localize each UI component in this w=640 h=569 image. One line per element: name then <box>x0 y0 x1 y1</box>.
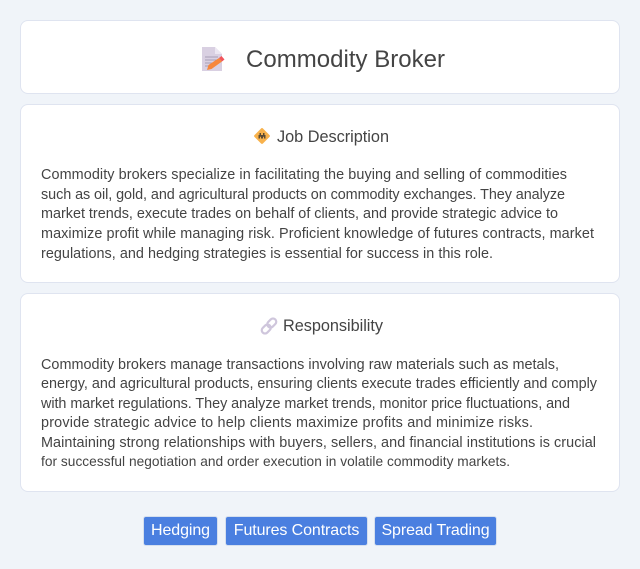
text block: responsibility: provide strategic advice to help clients maximize profits and minimize risks. <box>41 415 533 431</box>
tag: hedging <box>143 516 218 546</box>
text block: job description: market trends, execute trades on behalf of clients, and provide strategic advice to <box>41 206 558 222</box>
text block: responsibility: Commodity brokers manage transactions involving raw materials such as metals, <box>41 357 559 373</box>
text block: job description: maximize profit while managing risk. Proficient knowledge of futures contracts, market <box>41 226 594 242</box>
tag: spread trading <box>374 516 497 546</box>
text block: job description: regulations, and hedging strategies is essential for success in this role. <box>41 246 493 262</box>
panel: job description <box>20 104 620 283</box>
title: Commodity Broker <box>246 46 445 73</box>
text block: job description: Commodity brokers specialize in facilitating the buying and selling of commodities <box>41 167 567 183</box>
text block: responsibility: energy, and agricultural products, ensuring clients execute trades efficiently and comply <box>41 376 598 392</box>
tag: hedging: Hedging <box>151 522 210 539</box>
text block: responsibility: for successful negotiation and order execution in volatile commodity markets. <box>41 454 510 469</box>
tag: futures contracts <box>225 516 368 546</box>
icon: chain link <box>260 318 278 335</box>
text block: responsibility <box>40 357 598 469</box>
icon: diamond sign <box>254 128 270 144</box>
text block: job description: such as oil, gold, and agricultural products on commodity exchanges. They analyze <box>41 187 565 203</box>
panel: title card <box>20 20 620 94</box>
icon: document with pencil <box>202 47 224 71</box>
heading: job description: Job Description <box>277 128 389 146</box>
text block: responsibility: with market regulations. They analyze market trends, monitor price fluctuations, and <box>40 396 570 412</box>
text block: job description <box>41 167 594 262</box>
tag: spread trading: Spread Trading <box>381 522 490 539</box>
panel: responsibility <box>20 293 620 492</box>
heading: responsibility: Responsibility <box>283 317 384 335</box>
text block: responsibility: Maintaining strong relationships with buyers, sellers, and financial institutions is crucial <box>41 435 596 451</box>
tag: futures contracts: Futures Contracts <box>234 522 359 539</box>
